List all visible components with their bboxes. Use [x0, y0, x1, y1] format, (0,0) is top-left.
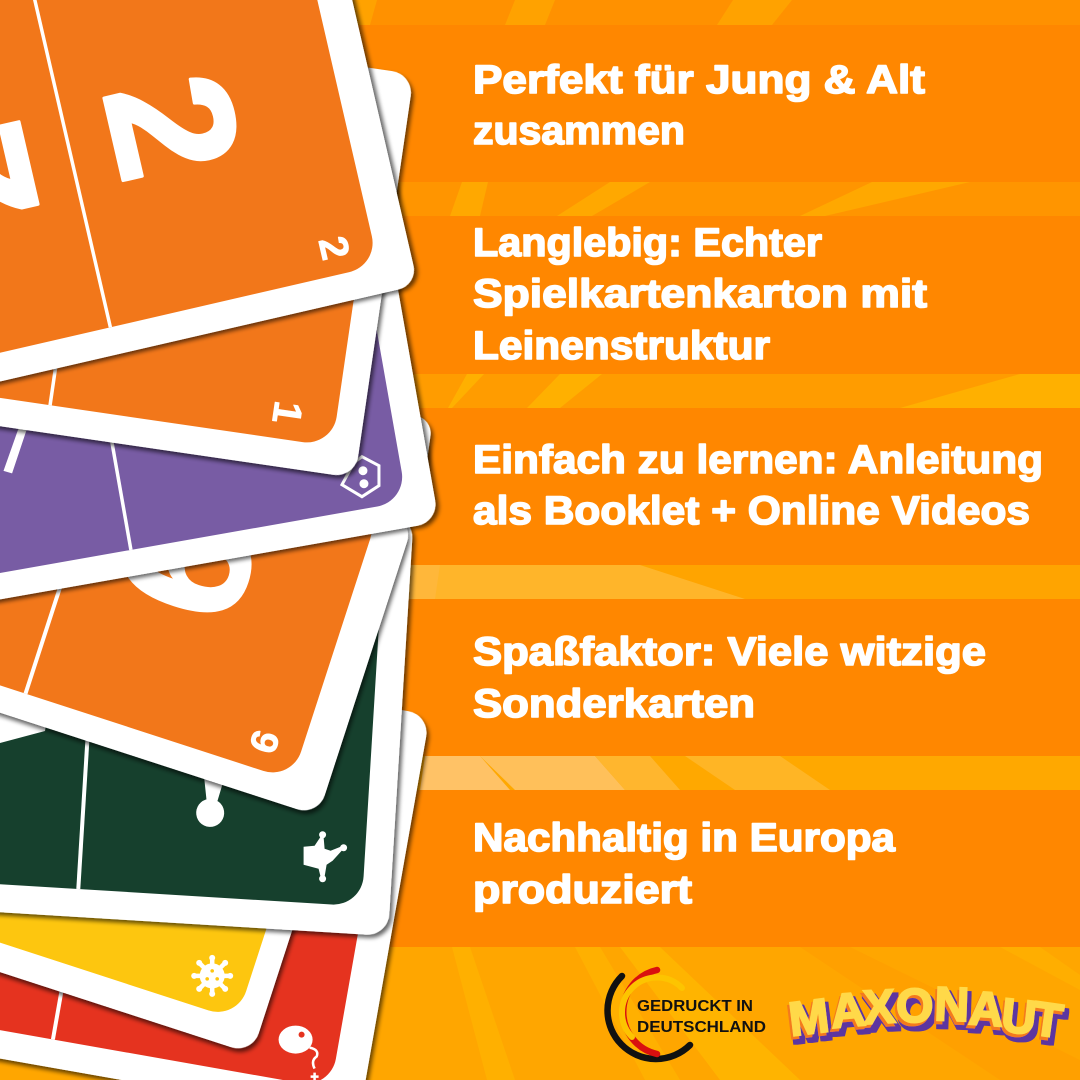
feature list	[473, 58, 1043, 912]
card: orange two (top)	[0, 0, 418, 487]
card: red with balloon icon	[0, 559, 430, 1080]
card: hidden white corner	[122, 376, 433, 517]
card: green with jester icon	[0, 462, 414, 936]
card: purple with hexagon icon	[0, 0, 439, 678]
card: orange nine	[0, 243, 414, 816]
icon: balloon	[279, 1026, 319, 1080]
feature: Jung und Alt: Perfekt für Jung & Alt	[473, 58, 925, 102]
badge: Gedruckt in Deutschland	[608, 970, 766, 1059]
feature: Spassfaktor	[473, 630, 986, 726]
feature: Einfach zu lernen: als Booklet + Online Videos	[473, 489, 1030, 533]
feature: Nachhaltig: produziert	[473, 868, 692, 912]
playing card fan	[0, 0, 439, 1080]
feature: Langlebig	[473, 221, 927, 368]
feature: Jung und Alt: zusammen	[473, 109, 685, 153]
big digit 9: 9	[71, 482, 299, 643]
feature: Einfach zu lernen	[473, 438, 1043, 533]
icon: hexagon dice	[342, 457, 379, 497]
card: orange one	[0, 0, 414, 478]
card: yellow with virus icon	[0, 567, 320, 1054]
badge: Gedruckt in Deutschland: DEUTSCHLAND	[637, 1019, 766, 1036]
big digit 2: 2	[65, 57, 278, 196]
feature: Nachhaltig: Nachhaltig in Europa	[473, 816, 896, 860]
badge: Gedruckt in Deutschland: GEDRUCKT IN	[637, 998, 753, 1015]
feature: Langlebig: Spielkartenkarton mit	[473, 272, 927, 316]
feature: Spassfaktor: Sonderkarten	[473, 682, 755, 726]
feature: Langlebig: Langlebig: Echter	[473, 221, 822, 265]
icon: virus	[191, 955, 233, 997]
icon: exclamation dot	[195, 772, 227, 828]
feature: Spassfaktor: Spaßfaktor: Viele witzige	[473, 630, 986, 674]
small digit 9: 9	[240, 725, 287, 758]
orange text bands	[340, 25, 1080, 947]
feature: Langlebig: Leinenstruktur	[473, 324, 770, 368]
logo: Maxonaut: MAXONAUT	[786, 978, 1066, 1049]
white symbol remnant on green card	[0, 700, 50, 743]
feature: Jung und Alt	[473, 58, 925, 153]
small digit 2: 2	[310, 232, 357, 264]
feature: Nachhaltig	[473, 816, 896, 912]
small digit 1: 1	[263, 398, 310, 427]
feature: Einfach zu lernen: Einfach zu lernen: Anleitung	[473, 438, 1043, 482]
icon: jester hat	[304, 831, 347, 882]
